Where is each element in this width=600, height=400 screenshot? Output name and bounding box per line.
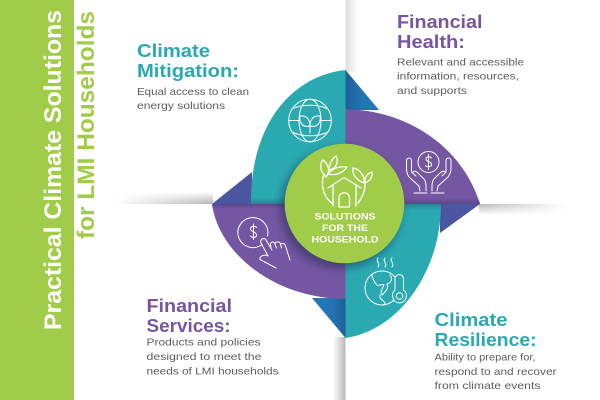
text: financial services: Services: (146, 316, 230, 336)
center circle (285, 144, 404, 263)
fold shadow: bottom (333, 337, 346, 400)
pinwheel diagram (212, 70, 480, 338)
text: financial health: Health: (397, 32, 465, 52)
icon: earth with thermometer and heat (365, 258, 406, 305)
fold triangle: right (440, 204, 480, 233)
sidebar (0, 0, 74, 400)
text: financial services: designed to meet the (146, 351, 262, 363)
fold shadow: top (346, 0, 358, 72)
text: climate resilience (434, 310, 557, 392)
text: climate mitigation: Equal access to clean (137, 86, 249, 98)
text: financial services (146, 296, 278, 378)
title: for LMI Households (73, 11, 100, 239)
center label: FOR THE (322, 223, 368, 234)
center label: HOUSEHOLD (312, 234, 379, 246)
fold triangle: top (346, 70, 379, 110)
petal: climate resilience (346, 204, 441, 338)
text: climate resilience: Ability to prepare for, (434, 352, 536, 364)
fold triangle: left (212, 172, 252, 204)
icon: globe with sprout (289, 99, 331, 142)
petal: climate mitigation (251, 70, 346, 204)
text: financial health: Relevant and accessible (397, 56, 524, 68)
fold shadow: right (479, 204, 557, 214)
text: financial services: Financial (146, 296, 232, 316)
text: financial services: needs of LMI households (146, 366, 278, 378)
text: financial health (397, 12, 524, 97)
text: financial health: Financial (397, 12, 482, 32)
text: climate mitigation: Climate (137, 41, 210, 61)
center label (312, 212, 379, 246)
text: financial health: information, resources, (397, 70, 519, 82)
icon: hands holding coin (406, 152, 451, 193)
circle shadow (280, 147, 402, 269)
fold shadow: left (126, 194, 213, 204)
text: climate mitigation (137, 41, 249, 112)
text: climate mitigation: Mitigation: (137, 61, 239, 81)
text: climate resilience: respond to and recover (434, 366, 557, 378)
text: financial services: Products and policies (146, 336, 260, 348)
fold triangle: bottom (312, 298, 346, 338)
petal: financial health (346, 109, 480, 204)
text: climate resilience: Resilience: (434, 330, 536, 350)
center label: SOLUTIONS (314, 212, 376, 222)
title: Practical Climate Solutions (40, 10, 67, 330)
text: climate resilience: from climate events (434, 380, 540, 392)
icon: hand tapping coin (238, 218, 290, 268)
text: climate mitigation: energy solutions (137, 100, 225, 112)
petal edge shade (212, 198, 480, 210)
icon: house with leaves (321, 156, 372, 207)
text: climate resilience: Climate (434, 310, 508, 330)
title (40, 10, 100, 330)
petal: financial services (212, 204, 346, 299)
text: financial health: and supports (397, 85, 467, 97)
